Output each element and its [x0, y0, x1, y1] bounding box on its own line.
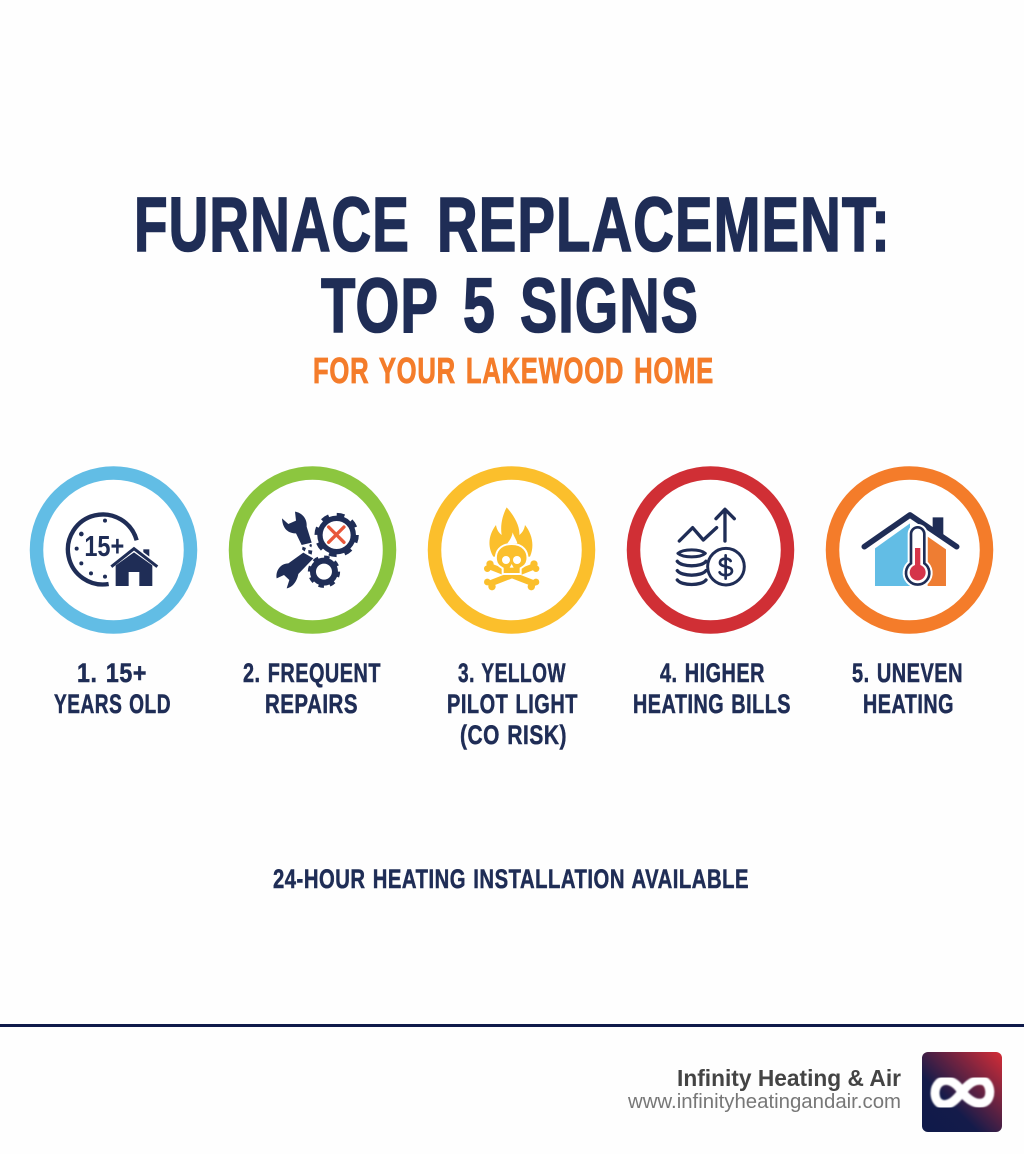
- icon: broken wrench: [276, 512, 313, 588]
- label: [852, 658, 963, 719]
- logo: [922, 1052, 1002, 1132]
- icon: coins and rising arrow: [677, 509, 744, 585]
- sign 4: higher heating bills: [633, 473, 791, 719]
- label: 3. YELLOW: [458, 658, 566, 688]
- label: [243, 658, 381, 719]
- title: [134, 182, 891, 349]
- icon: flame and skull: [484, 507, 539, 590]
- icon: house with thermometer: [864, 515, 957, 586]
- sign 1: 15+ years old: [36, 473, 190, 719]
- label: [54, 658, 171, 719]
- label: [633, 658, 791, 719]
- ring: green: [236, 473, 390, 627]
- sign 3: yellow pilot light: [434, 473, 588, 750]
- label: (CO RISK): [460, 720, 567, 750]
- title: SIGNS: [520, 263, 699, 349]
- icon: clock and house: [68, 514, 157, 586]
- title: TOP: [321, 263, 439, 349]
- label: YEARS OLD: [54, 689, 171, 719]
- label: [447, 658, 578, 750]
- label: PILOT LIGHT: [447, 689, 578, 719]
- subtitle: FOR YOUR LAKEWOOD HOME: [313, 350, 714, 391]
- ring: yellow: [434, 473, 588, 627]
- footer company name: Infinity Heating & Air: [677, 1065, 901, 1091]
- icon: clock and house: 15+: [84, 531, 124, 563]
- label: HEATING: [863, 689, 954, 719]
- ring: blue: [36, 473, 190, 627]
- title: 5: [463, 263, 496, 349]
- label: 2. FREQUENT: [243, 658, 381, 688]
- title: FURNACE: [134, 182, 410, 268]
- availability note: 24-HOUR HEATING INSTALLATION AVAILABLE: [273, 864, 749, 894]
- ring: red: [634, 473, 788, 627]
- sign 5: uneven heating: [832, 473, 986, 719]
- footer website: www.infinityheatingandair.com: [627, 1091, 901, 1113]
- label: 1. 15+: [77, 658, 147, 688]
- label: HEATING BILLS: [633, 689, 791, 719]
- label: REPAIRS: [265, 689, 358, 719]
- ring: orange: [832, 473, 986, 627]
- label: 4. HIGHER: [660, 658, 765, 688]
- label: 5. UNEVEN: [852, 658, 963, 688]
- sign 2: frequent repairs: [236, 473, 390, 719]
- icon: gears: [310, 515, 357, 586]
